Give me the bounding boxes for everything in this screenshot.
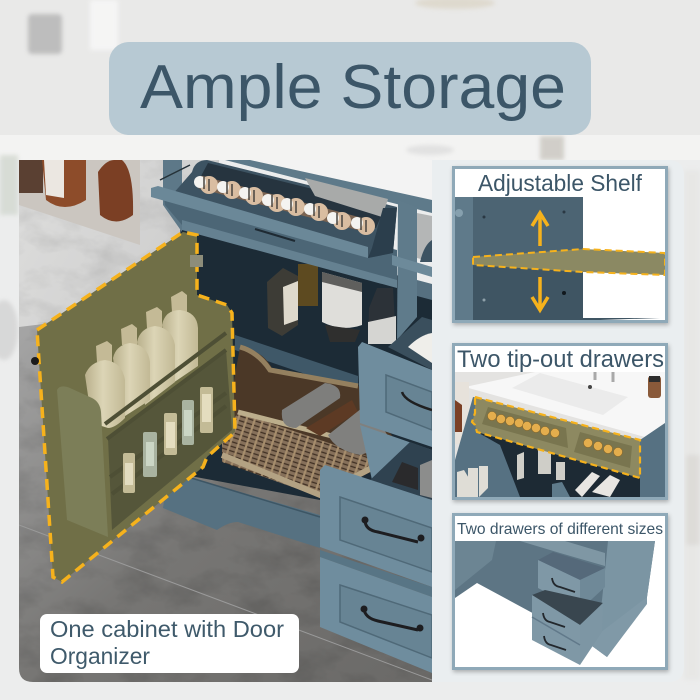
small bottles <box>123 387 213 493</box>
caption: one cabinet with door organizer: Organizer <box>50 643 150 669</box>
organizer lower shade <box>108 350 232 530</box>
plinth base <box>163 477 320 548</box>
panel: right side column <box>432 160 684 682</box>
arrow down <box>532 277 548 310</box>
cabinet left leg and top band <box>163 160 432 232</box>
basket with towels <box>222 347 395 497</box>
knob row <box>194 176 375 235</box>
card: two drawers of different sizes <box>454 514 666 668</box>
frame behind drawer <box>164 201 397 280</box>
vanity photo <box>455 372 665 497</box>
interior shelf <box>235 335 358 384</box>
title pill <box>109 42 591 135</box>
door bottles <box>85 291 198 428</box>
highlighted shelf <box>473 249 665 275</box>
floor tile joint <box>19 525 432 680</box>
interior bottles <box>267 264 396 345</box>
dashed outline <box>37 232 235 582</box>
floor <box>19 322 432 682</box>
highlighted tip-out drawers <box>472 397 640 478</box>
centre post and right rail <box>392 200 432 340</box>
drawers photo <box>455 541 655 665</box>
heading: Adjustable Shelf <box>478 170 643 196</box>
arrow up <box>532 213 548 246</box>
wall niche with amber bottles <box>19 160 140 245</box>
lower drawer <box>532 590 603 665</box>
tip-out drawer with knobs <box>151 160 397 288</box>
cabinet interior <box>180 215 432 500</box>
shelf photo <box>455 197 665 320</box>
door hinge <box>190 255 203 267</box>
gold knobs <box>488 412 622 456</box>
door handle knob <box>31 357 39 365</box>
panel: main cabinet photo <box>19 160 432 682</box>
upper drawer <box>538 552 605 600</box>
middle drawer with handle <box>320 425 432 587</box>
heading: Two tip-out drawers <box>457 346 664 373</box>
bottles <box>517 450 565 480</box>
organizer side panel <box>57 386 108 537</box>
heading: Two drawers of different sizes <box>457 521 663 538</box>
card: adjustable shelf <box>454 168 666 322</box>
caption: one cabinet with door organizer: One cabinet with Door <box>50 616 284 642</box>
highlighted door with organizer <box>37 232 235 582</box>
bottom drawer with handle <box>320 550 432 673</box>
wall <box>19 160 219 327</box>
card: two tip-out drawers <box>454 344 666 498</box>
title pill: Ample Storage <box>140 53 566 122</box>
door shelf rails <box>105 333 226 494</box>
upper open drawer <box>358 317 432 447</box>
caption: one cabinet with door organizer <box>40 614 299 673</box>
